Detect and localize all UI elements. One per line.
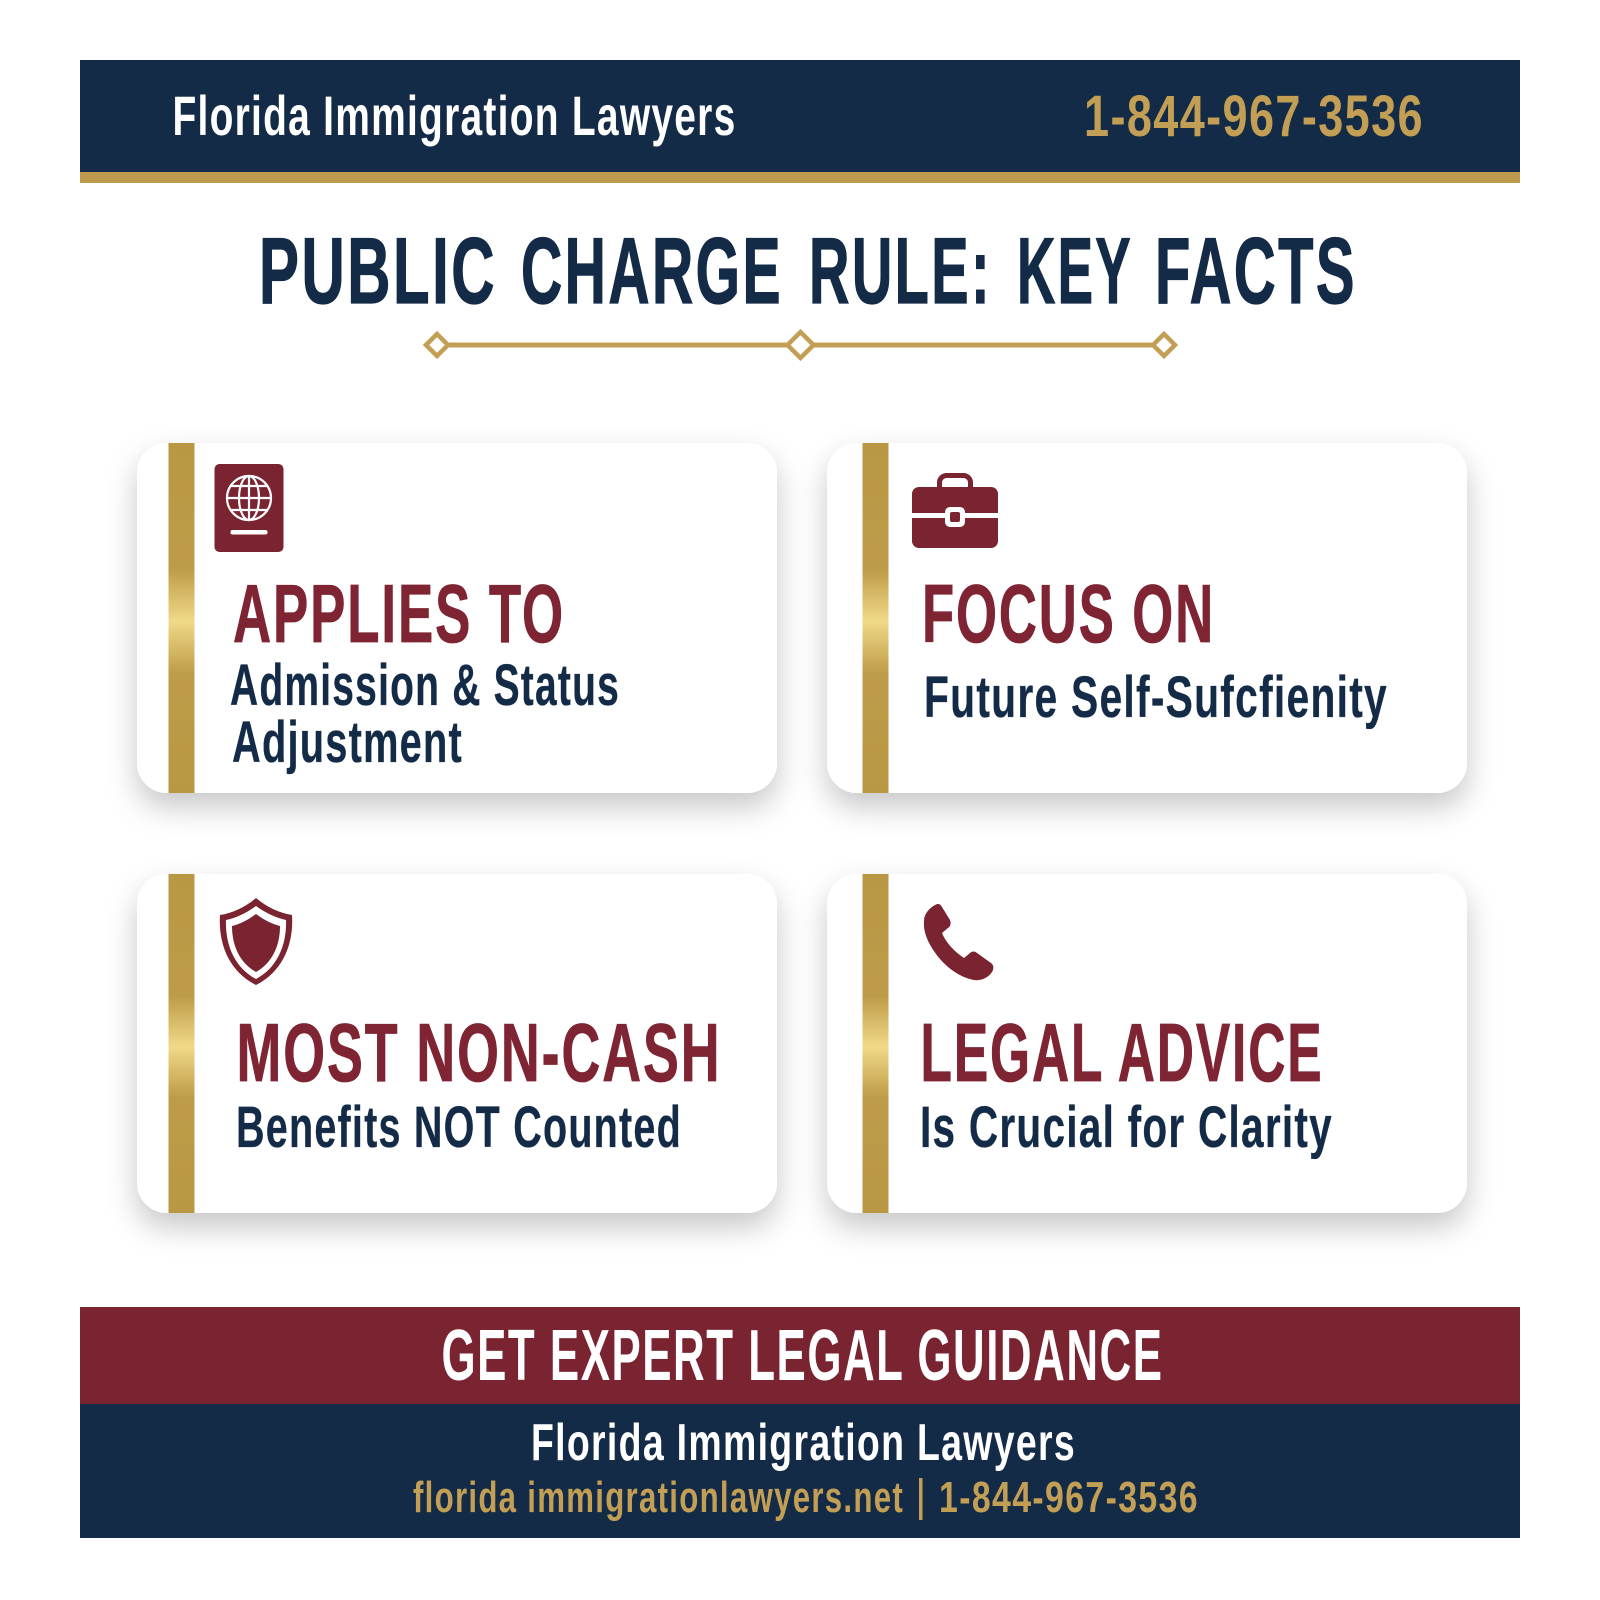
title divider with diamonds [426, 332, 1175, 358]
focus on description: Future Self-Sufcfienity [924, 665, 1388, 730]
title: RULE: [809, 218, 992, 323]
footer website: florida immigrationlawyers.net [413, 1473, 904, 1522]
applies to description [230, 653, 620, 775]
icon: passport [214, 464, 284, 552]
most non-cash description: Benefits NOT Counted [236, 1095, 682, 1160]
panel: most non-cash [137, 874, 777, 1213]
footer separator [919, 1478, 922, 1520]
title [259, 218, 1357, 323]
most non-cash heading: MOST NON-CASH [236, 1006, 722, 1099]
icon: briefcase [912, 476, 998, 548]
call to action band [80, 1307, 1520, 1405]
icon: shield [220, 898, 292, 985]
footer firm name: Florida Immigration Lawyers [531, 1414, 1076, 1472]
header firm name: Florida Immigration Lawyers [172, 84, 736, 147]
title: CHARGE [521, 218, 783, 323]
top header banner [80, 60, 1520, 183]
footer contact band [80, 1404, 1520, 1538]
footer phone number: 1-844-967-3536 [939, 1473, 1199, 1522]
applies to heading: APPLIES TO [233, 567, 565, 660]
focus on heading: FOCUS ON [922, 567, 1215, 660]
title: FACTS [1155, 218, 1357, 323]
applies to description: Adjustment [232, 710, 463, 775]
call to action heading: GET EXPERT LEGAL GUIDANCE [442, 1316, 1164, 1396]
title: PUBLIC [259, 218, 497, 323]
legal advice description: Is Crucial for Clarity [920, 1095, 1333, 1160]
icon: phone [924, 904, 993, 980]
applies to description: Admission & Status [230, 653, 620, 718]
title: KEY [1017, 218, 1133, 323]
panel: focus on [827, 443, 1467, 793]
legal advice heading: LEGAL ADVICE [920, 1006, 1324, 1099]
header phone number: 1-844-967-3536 [1084, 84, 1424, 149]
panel: applies to [137, 443, 777, 793]
panel: legal advice [827, 874, 1467, 1213]
